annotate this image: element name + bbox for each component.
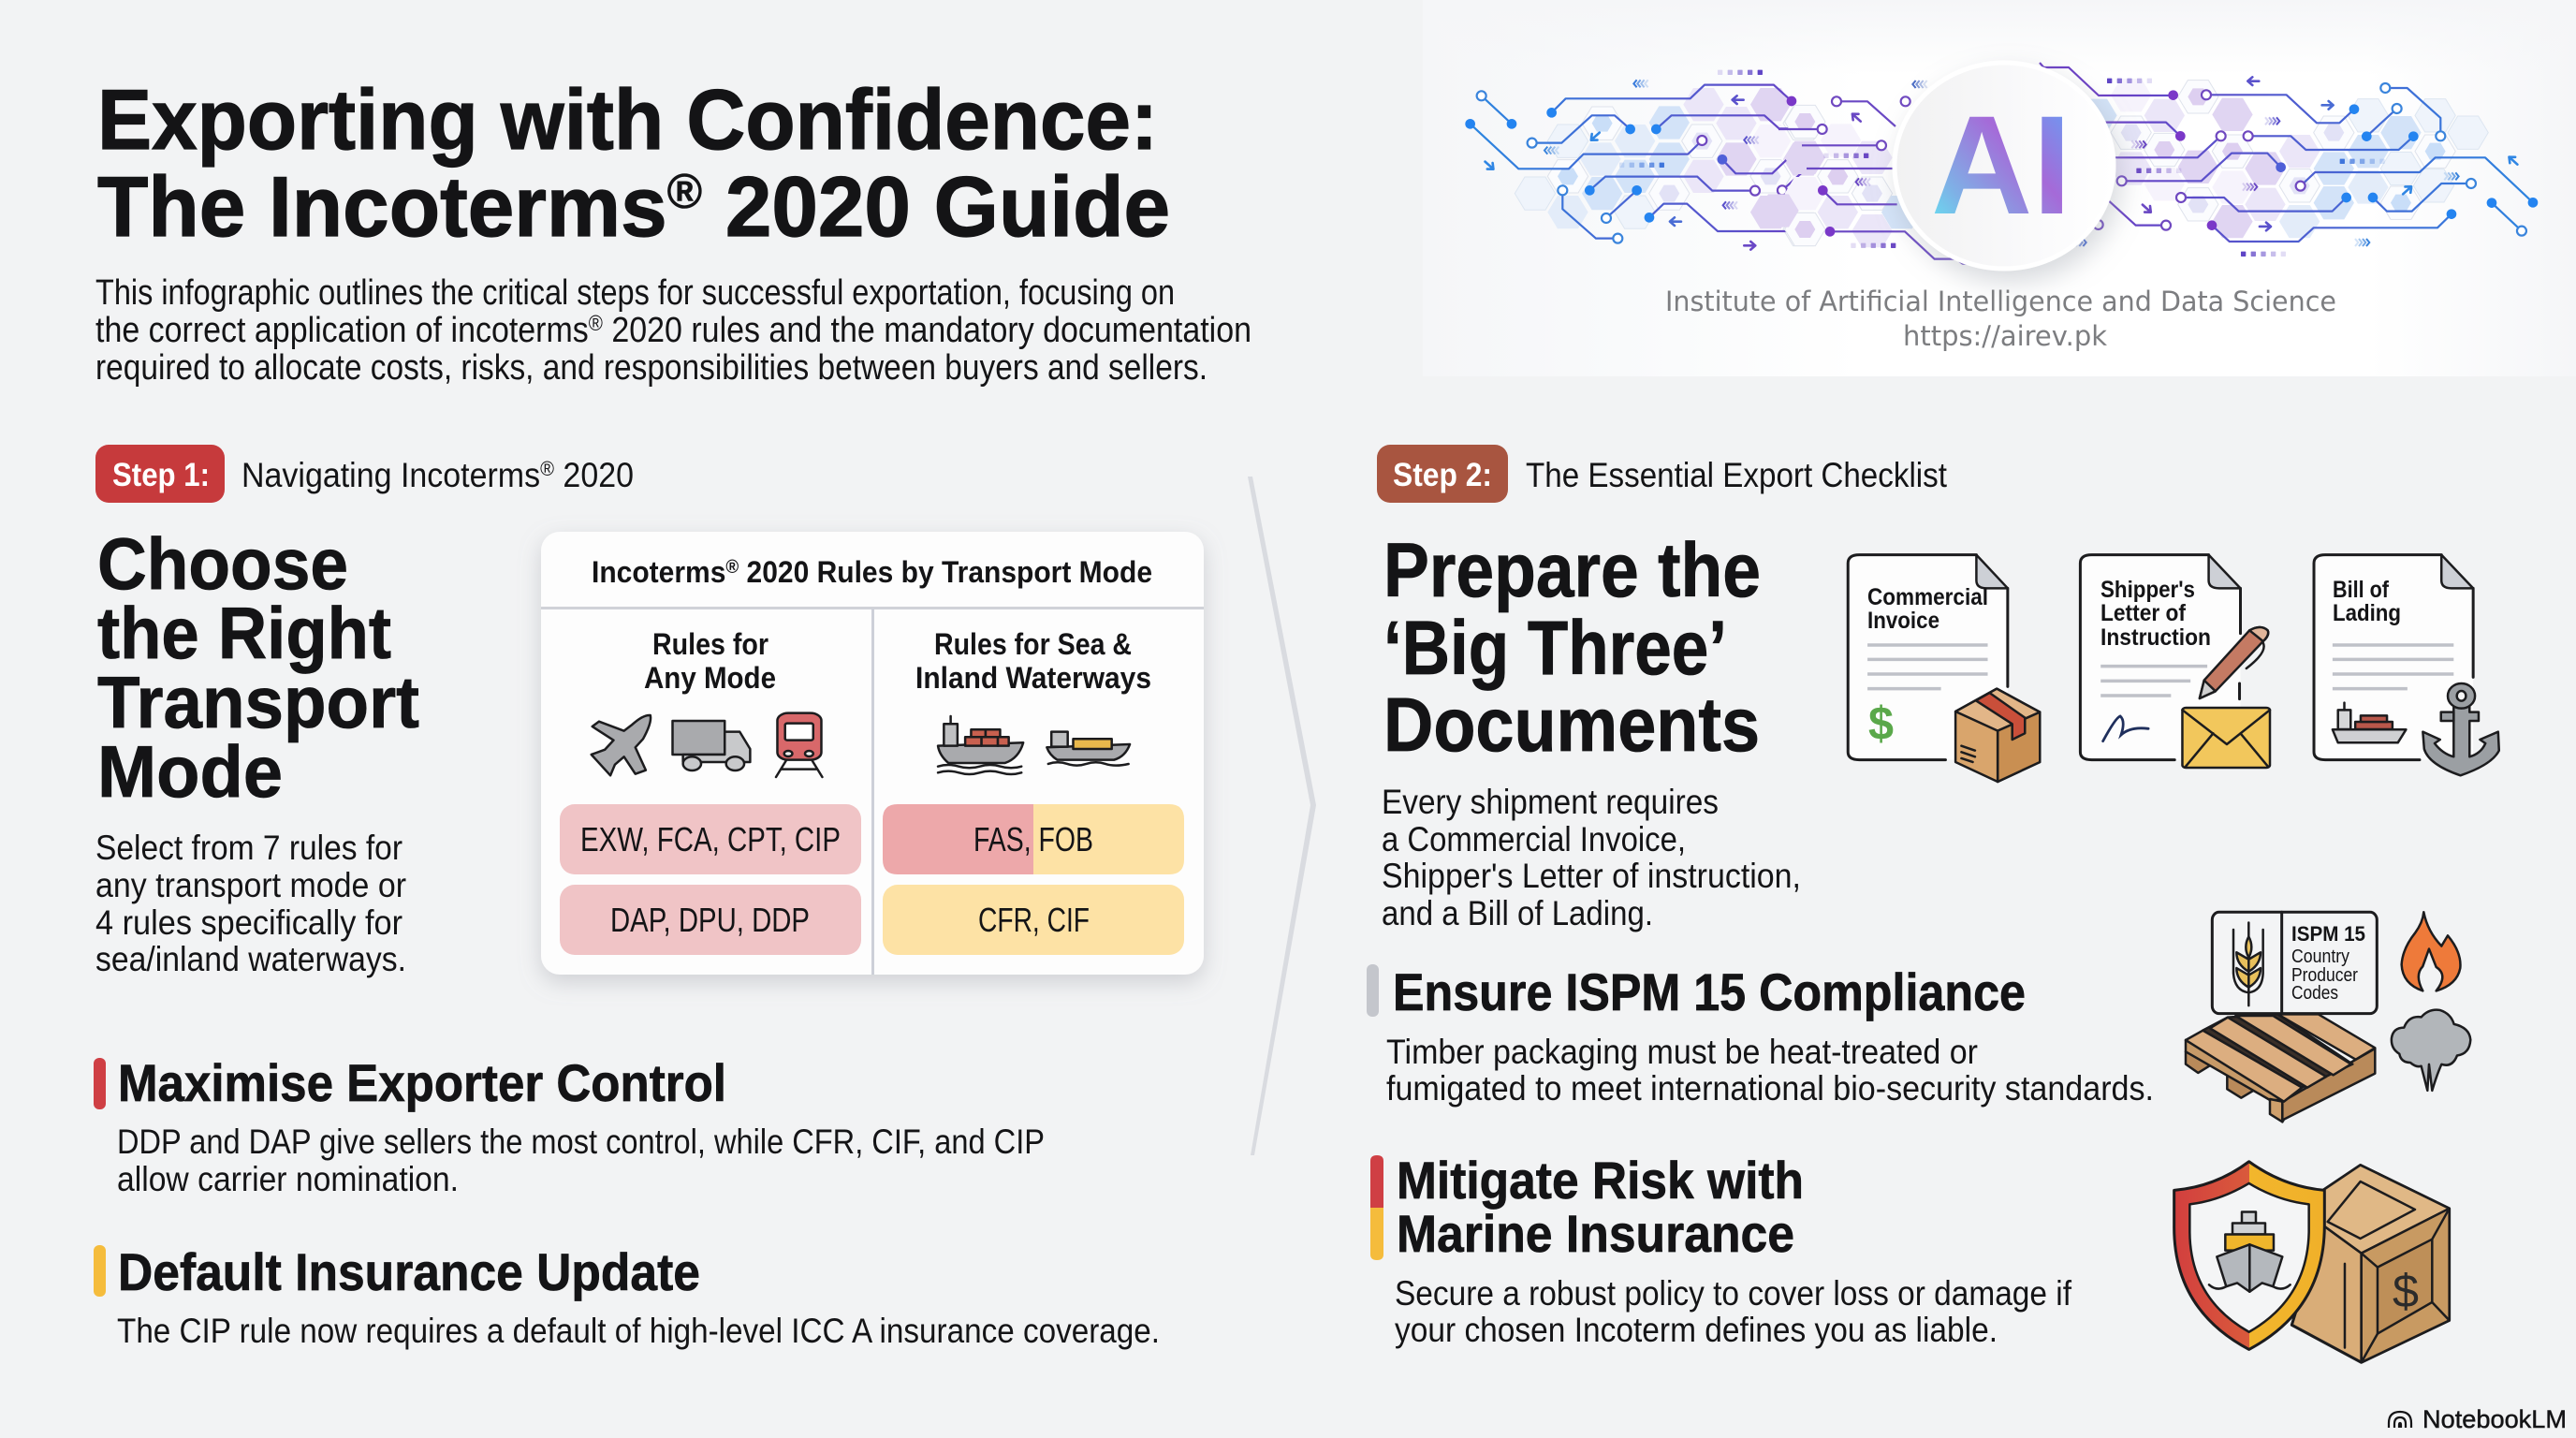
document label (2333, 577, 2401, 626)
stamp label: Producer (2291, 965, 2358, 986)
heading: prepare the big three (1383, 528, 1761, 768)
heading: choose the right transport mode: Mode (97, 730, 283, 813)
column heading: any mode: Rules for (652, 627, 768, 661)
document label: Letter of (2100, 600, 2187, 626)
title: The Incoterms (97, 160, 680, 255)
arrow: chevron divider (1248, 477, 1316, 1155)
title: Exporting with Confidence: (97, 73, 1158, 168)
icons: plane truck train ship barge (592, 713, 1130, 777)
heading: mitigate risk with marine insurance: Mitigate Risk with (1397, 1151, 1804, 1210)
heading: ensure ispm 15 compliance: Ensure ISPM 15 Compliance (1393, 962, 2026, 1021)
heading: prepare the big three: ‘Big Three’ (1383, 606, 1727, 691)
stamp label (2291, 922, 2365, 1004)
stamp label: Country (2291, 946, 2349, 967)
ispm text: Timber packaging must be heat-treated or (1386, 1033, 1978, 1071)
table title: 2020 Rules by Transport Mode (739, 555, 1152, 589)
intro text (95, 273, 1251, 388)
institute url: https://airev.pk (1903, 320, 2107, 352)
pill: DAP DPU DDP: DAP, DPU, DDP (610, 901, 810, 939)
exporter control text: DDP and DAP give sellers the most control, while CFR, CIF, and CIP (117, 1123, 1045, 1161)
step 2 heading: The Essential Export Checklist (1526, 456, 1948, 494)
big three text: Shipper's Letter of instruction, (1382, 857, 1801, 895)
intro text: the correct application of incoterms (95, 311, 647, 350)
pill: FAS FOB split: FAS, FOB (973, 820, 1093, 858)
step 2 badge (1377, 445, 1508, 503)
notebooklm credit: NotebookLM (2422, 1405, 2567, 1433)
panel: incoterms rules table (541, 532, 1204, 975)
title: 2020 Guide (702, 160, 1170, 255)
table title: ® (725, 557, 739, 578)
pill: EXW FCA CPT CIP: EXW, FCA, CPT, CIP (580, 820, 841, 858)
step 1 badge (95, 445, 225, 503)
marine insurance text: Secure a robust policy to cover loss or damage if (1395, 1274, 2072, 1313)
heading: mitigate risk with marine insurance: Marine Insurance (1397, 1204, 1794, 1263)
pill: CFR CIF (883, 885, 1184, 955)
big three text (1382, 783, 1801, 932)
header panel: institute logo (1423, 0, 2576, 376)
heading: choose the right transport mode: Transport (97, 661, 419, 743)
insurance update text: The CIP rule now requires a default of high-level ICC A insurance coverage. (117, 1312, 1160, 1350)
circuit network: right part (2040, 63, 2538, 257)
transport mode text: sea/inland waterways. (95, 940, 406, 978)
icon: ispm stamp, pallet, flame, fumigation cloud (2186, 912, 2470, 1122)
document label: Invoice (1867, 608, 1939, 634)
ispm text: fumigated to meet international bio-security standards. (1386, 1069, 2154, 1108)
document label: Instruction (2100, 624, 2211, 651)
intro text: 2020 rules and the mandatory documentation (603, 311, 1251, 350)
pill: DAP DPU DDP (560, 885, 861, 955)
column heading: sea and inland waterways: Inland Waterways (915, 661, 1151, 695)
table title: Incoterms (592, 555, 735, 589)
circuit network: centre left part (1758, 81, 1972, 264)
heading: choose the right transport mode: the Right (97, 592, 391, 674)
crate dollar sign: $ (2393, 1265, 2419, 1317)
crate (2291, 1165, 2450, 1362)
column heading: sea and inland waterways (915, 627, 1151, 695)
step 1 heading: ® (540, 457, 554, 480)
step 1 heading: 2020 (554, 456, 634, 494)
bar: ispm (1367, 964, 1379, 1017)
icon: shipper's letter of instruction document (2080, 555, 2270, 768)
heading: prepare the big three: Documents (1383, 682, 1760, 768)
heading: default insurance update: Default Insurance Update (118, 1242, 700, 1301)
transport mode text: 4 rules specifically for (95, 903, 402, 942)
document label: Lading (2333, 600, 2401, 626)
heading: choose the right transport mode: Choose (97, 522, 348, 605)
heading: maximise exporter control: Maximise Exporter Control (118, 1053, 726, 1112)
pill: CFR CIF: CFR, CIF (978, 901, 1090, 939)
big three text: Every shipment requires (1382, 783, 1719, 821)
icon: shield and crate (2174, 1162, 2450, 1362)
heading: choose the right transport mode (97, 522, 419, 813)
document label (2100, 577, 2211, 651)
document label: Bill of (2333, 577, 2390, 603)
document label (1867, 584, 1988, 634)
big three text: a Commercial Invoice, (1382, 820, 1686, 858)
stamp label: ISPM 15 (2291, 922, 2365, 946)
pallet (2186, 1014, 2375, 1122)
dollar sign: $ (1868, 697, 1894, 750)
stamp box (2212, 912, 2377, 1014)
document label: Shipper's (2100, 577, 2195, 603)
shield (2174, 1162, 2324, 1349)
intro text: ® (589, 311, 603, 335)
big three text: and a Bill of Lading. (1382, 894, 1653, 932)
flame (2402, 912, 2460, 990)
bar: exporter control (94, 1058, 106, 1109)
fumigation cloud (2392, 1010, 2470, 1091)
pill: FAS FOB split (883, 804, 1184, 874)
exporter control text (117, 1123, 1045, 1198)
ispm text (1386, 1033, 2154, 1108)
transport mode text: Select from 7 rules for (95, 829, 402, 867)
bar: insurance update (94, 1245, 106, 1297)
column heading: any mode (644, 627, 776, 695)
step 1 badge: Step 1: (112, 457, 210, 493)
step 1 heading: Navigating Incoterms (242, 456, 567, 494)
title (97, 73, 1170, 255)
heading: mitigate risk with marine insurance (1397, 1151, 1804, 1263)
AI gradient letters: AI (1931, 86, 2071, 243)
intro text: This infographic outlines the critical steps for successful exportation, focusing on (95, 273, 1175, 313)
institute name: Institute of Artificial Intelligence and Data Science (1665, 286, 2336, 317)
stamp label: Codes (2291, 983, 2338, 1004)
icon: commercial invoice document (1848, 555, 2040, 782)
circuit network: left part (1465, 70, 1823, 250)
title: ® (667, 165, 702, 219)
document label: Commercial (1867, 584, 1988, 610)
bar: marine insurance (1370, 1155, 1383, 1260)
transport mode text (95, 829, 406, 978)
column heading: sea and inland waterways: Rules for Sea & (934, 627, 1132, 661)
marine insurance text (1395, 1274, 2072, 1349)
column heading: any mode: Any Mode (644, 661, 776, 695)
icon: bill of lading document (2314, 555, 2499, 775)
AI badge circle (1895, 63, 2114, 269)
intro text: required to allocate costs, risks, and responsibilities between buyers and sellers. (95, 348, 1208, 388)
pill: EXW FCA CPT CIP (560, 804, 861, 874)
heading: prepare the big three: Prepare the (1383, 528, 1761, 613)
transport mode text: any transport mode or (95, 866, 406, 904)
exporter control text: allow carrier nomination. (117, 1160, 459, 1198)
step 2 badge: Step 2: (1393, 457, 1492, 493)
marine insurance text: your chosen Incoterm defines you as liable. (1395, 1311, 1998, 1349)
